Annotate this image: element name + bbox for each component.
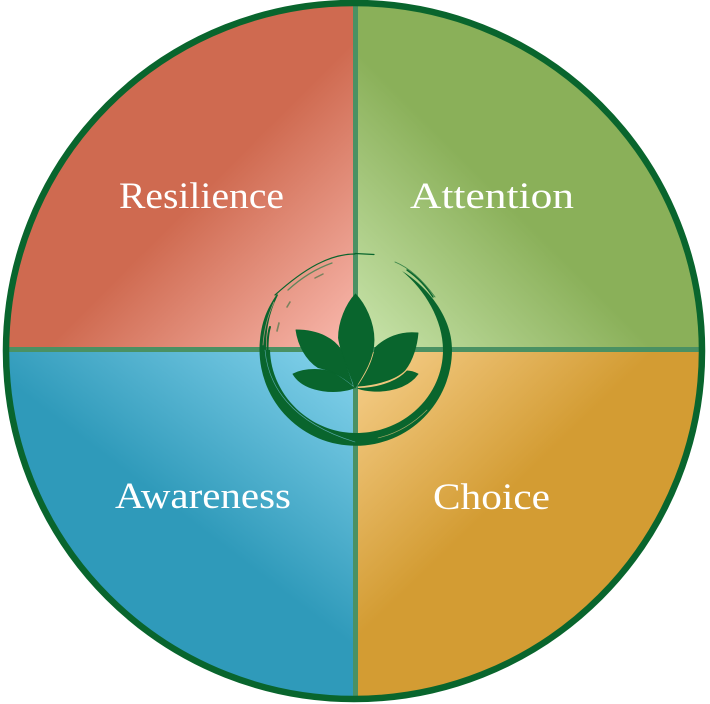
label: Resilience: Resilience: [119, 176, 284, 217]
quadrant: attention: [354, 0, 710, 350]
label: Choice: Choice: [433, 477, 550, 518]
lotus petal: lower left: [293, 370, 354, 391]
lotus petal: upper left: [296, 330, 352, 385]
lotus petal: center: [338, 294, 374, 388]
lotus petal: lower right: [358, 371, 418, 391]
lotus petal: upper right: [358, 333, 418, 386]
label: Attention: Attention: [410, 176, 574, 217]
lotus petals: [293, 294, 418, 391]
quadrant: resilience: [0, 0, 354, 350]
label: Awareness: Awareness: [115, 476, 291, 517]
quadrant: choice: [354, 350, 710, 704]
icon: lotus in brush circle: [260, 254, 452, 446]
brush circle: [260, 254, 452, 446]
quadrant: awareness: [0, 350, 354, 704]
